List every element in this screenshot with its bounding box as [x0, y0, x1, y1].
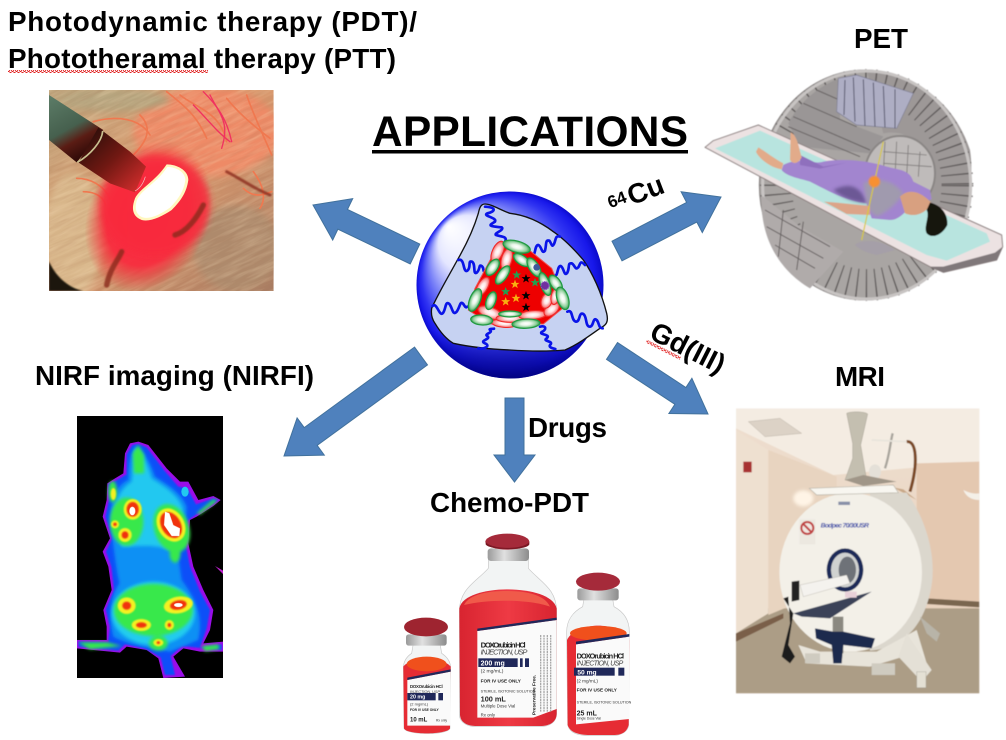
- vial: 25 mL: FOR IV USE ONLY: [577, 688, 618, 693]
- photo: NIRF mouse image: [77, 416, 223, 678]
- vial: 10 mL: (2 mg/mL): [410, 701, 429, 706]
- label: 64Cu: 64: [605, 187, 630, 212]
- vial: 10 mL: 10 mL: [410, 718, 428, 724]
- nanoparticle diagram: [431, 204, 607, 351]
- heading: MRI: MRI: [835, 361, 885, 392]
- vial: 10 mL: 20 mg: [410, 695, 425, 701]
- photo: PET scanner illustration: [705, 70, 1003, 300]
- vial: 100 mL: Rx only: [481, 713, 496, 718]
- label: 64Cu: Cu: [623, 169, 668, 211]
- central nanoparticle sphere: [416, 192, 607, 378]
- vial: 100 mL: 100 mL: [481, 694, 506, 703]
- vial: 25 mL: DOXOrubicin HCl: [577, 651, 624, 660]
- vial: 100 mL: FOR IV USE ONLY: [481, 678, 522, 683]
- label: Drugs: Drugs: [528, 412, 607, 443]
- vial: 100 mL: 200 mg: [481, 660, 505, 667]
- photo: PDT laser on fur: [49, 90, 274, 291]
- heading: PDT/PTT: Phototheramal therapy (PTT): [8, 43, 396, 74]
- vial: 100 mL: STERILE, ISOTONIC SOLUTION: [481, 690, 536, 694]
- vial: 25 mL: STERILE, ISOTONIC SOLUTION: [577, 700, 632, 704]
- photo: MRI scanner room: Bodpec 70/30USR: [821, 522, 869, 529]
- vial: 10 mL: FOR IV USE ONLY: [410, 708, 440, 712]
- vial: 10 mL: INJECTION, USP: [410, 689, 440, 694]
- vial: 100 mL: DOXOrubicin HCl: [481, 640, 526, 649]
- vial: 25 mL: Single Dose Vial: [577, 717, 601, 721]
- dark fur patches: [107, 172, 270, 285]
- vial: 100 mL: INJECTION, USP: [481, 648, 527, 657]
- vial: 10 mL: DOXOrubicin HCl: [410, 684, 443, 689]
- vial: 10 mL: [403, 618, 451, 734]
- vial: 100 mL: [459, 534, 557, 727]
- vial: 100 mL: (2 mg/mL): [481, 669, 504, 675]
- vial: 100 mL: Preservative Free.: [532, 675, 537, 715]
- photo: MRI scanner room: [736, 408, 979, 693]
- heading: Chemo-PDT: Chemo-PDT: [430, 487, 589, 518]
- vial: 10 mL: Rx only: [436, 719, 447, 723]
- fur texture: [49, 90, 274, 291]
- heading: NIRF imaging: NIRF imaging (NIRFI): [35, 360, 314, 391]
- vial: 25 mL: 50 mg: [577, 669, 597, 676]
- arrow: to NIRF: [284, 347, 428, 456]
- arrow: to Chemo-PDT: [494, 398, 535, 482]
- vial: 25 mL: INJECTION, USP: [577, 661, 624, 668]
- main title: APPLICATIONS: APPLICATIONS: [372, 108, 688, 155]
- label: Gd(III): Gd(III): [645, 316, 731, 380]
- heading: PET: PET: [854, 23, 908, 54]
- heading: PDT/PTT: [8, 6, 417, 74]
- label: 64Cu: [603, 169, 668, 219]
- fur strokes: [77, 92, 272, 222]
- vial: 100 mL: Multiple Dose Vial: [481, 703, 515, 708]
- vial: 25 mL: [567, 573, 632, 736]
- photo: doxorubicin vials: [403, 534, 632, 736]
- vial: 25 mL: (2 mg/mL): [577, 678, 598, 683]
- arrow: to PET: [612, 192, 721, 261]
- arrow: to MRI: [606, 343, 708, 414]
- heading: PDT/PTT: Photodynamic therapy (PDT)/: [8, 6, 417, 37]
- arrow: to PDT: [313, 199, 420, 264]
- vial: 25 mL: 25 mL: [577, 711, 598, 718]
